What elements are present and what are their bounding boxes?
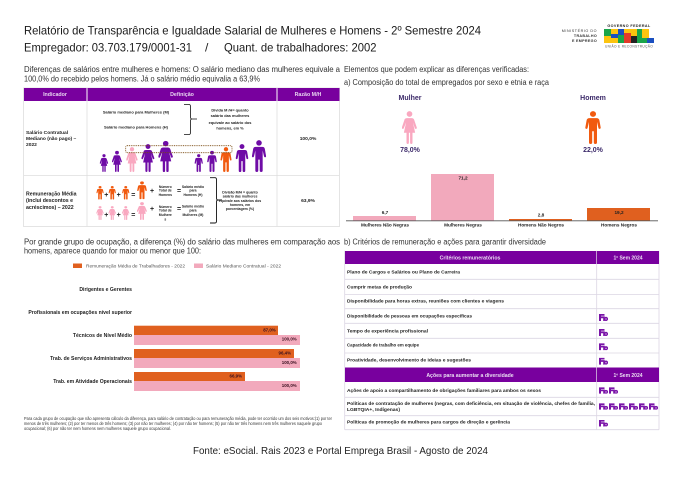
panel: critérios remuneratórios <box>345 251 659 430</box>
formula signs: + <box>117 192 121 199</box>
criteria list: Plano de Cargos e Salários ou Plano de Carreira <box>347 270 461 275</box>
bar chart: ocupações: Trab. de Serviços Administrativos <box>50 356 132 362</box>
title: Quant. de trabalhadores: 2002 <box>224 40 377 54</box>
row: salário contratual mediano: salário das mulheres <box>211 113 249 118</box>
panel: ações para aumentar a diversidade <box>345 368 659 426</box>
criteria list: Disponibilidade para horas extras, reuniões com clientes e viagens <box>347 299 505 304</box>
text block: grande grupo de ocupação: Por grande grupo de ocupação, a diferença (%) do salário das mulheres em comparação aos <box>24 237 340 246</box>
formula signs: = <box>131 212 135 219</box>
actions list <box>347 388 595 425</box>
icons: critérios marcados <box>599 314 608 365</box>
table header: Ações para aumentar a diversidade <box>426 373 514 379</box>
criteria list: Capacidade de trabalho em equipe <box>347 343 419 348</box>
formula text: Salário médio <box>182 185 204 189</box>
row: salário contratual mediano: Salário mediano para Mulheres (M) <box>103 110 170 114</box>
table header <box>345 368 659 382</box>
bar chart: sexo e raça: Homens Negros <box>601 222 637 228</box>
text block: grande grupo de ocupação: homens, aparece quando for maior ou menor que 100: <box>24 246 201 255</box>
formula signs: = <box>131 192 135 199</box>
bar chart: sexo e raça <box>346 174 658 228</box>
text block: diferenças de salários: Diferenças de salários entre mulheres e homens: O salário mediano das mulheres equivale a <box>24 65 341 74</box>
panel: mulher: Mulher <box>399 95 422 102</box>
bar chart: ocupações: 96,4% <box>279 350 291 356</box>
row: salário contratual mediano: equivale ao salário dos <box>209 120 251 125</box>
row: salário contratual mediano: 2022 <box>26 142 37 148</box>
row: salário contratual mediano: homens, em % <box>216 126 244 130</box>
bar chart: sexo e raça: 6,7 <box>382 210 389 215</box>
criteria list: Disponibilidade de pessoas em ocupações específicas <box>347 314 473 319</box>
footnote: menos de três mulheres; (2) por ter menos de três homens; (3) por não ter mulheres; (4) por não ter homens; (5) por não ter três homens nem três mulheres naquele grupo <box>24 421 323 426</box>
row: salário contratual mediano: Salário mediano para Homens (H) <box>104 124 169 130</box>
row: remuneração média: Remuneração Média <box>26 192 77 198</box>
formula text: Total de <box>159 189 172 193</box>
icons: ações marcadas <box>599 387 658 426</box>
bar chart: ocupações: Profissionais em ocupações nível superior <box>28 310 132 316</box>
formula text: Homens <box>159 193 172 197</box>
table header: Indicador <box>43 92 67 98</box>
bar chart: sexo e raça: 71,2 <box>458 176 468 181</box>
formula signs: + <box>117 212 121 219</box>
panel: mulher: 78,0% <box>400 147 421 154</box>
table header: Critérios remuneratórios <box>440 256 501 262</box>
bar chart: sexo e raça: Mulheres Negras <box>444 222 482 228</box>
formula signs: + <box>150 188 154 195</box>
panel: homem: 22,0% <box>583 147 604 154</box>
criteria list: Proatividade, desenvolvimento de ideias e sugestões <box>347 358 472 363</box>
text block: diferenças de salários <box>24 65 341 84</box>
formula text: Número <box>159 205 172 209</box>
formula definition: homens, em <box>230 203 250 207</box>
formula signs <box>104 188 181 219</box>
formula signs: = <box>177 188 181 195</box>
bar chart: sexo e raça: 19,2 <box>614 210 624 215</box>
panel: mulher <box>399 95 422 154</box>
table header: 1º Sem 2024 <box>613 373 643 379</box>
title: Relatório de Transparência e Igualdade Salarial de Mulheres e Homens - 2º Semestre 2024 <box>24 24 481 38</box>
bar chart: sexo e raça: 2,8 <box>538 212 545 218</box>
footnote <box>24 416 333 431</box>
row: salário contratual mediano: 100,0% <box>300 136 317 142</box>
icons: fórmula homens <box>96 181 147 200</box>
formula signs: + <box>150 206 154 213</box>
formula definition <box>219 190 261 211</box>
text block: elementos <box>344 65 550 87</box>
source: Fonte: eSocial. Rais 2023 e Portal Emprega Brasil - Agosto de 2024 <box>193 445 488 457</box>
legend: Remuneração Média de Trabalhadores - 2022 <box>86 264 185 270</box>
bar chart: ocupações: 100,0% <box>282 360 297 365</box>
formula signs: = <box>177 206 181 213</box>
row: salário contratual mediano: Divida M /H= quanto <box>211 108 249 112</box>
bar chart: ocupações: Técnicos de Nível Médio <box>73 333 132 339</box>
icons: mulheres e homens medianos <box>100 140 266 172</box>
title <box>24 24 481 54</box>
logo: ministério e governo federal: MINISTÉRIO DO <box>562 28 597 33</box>
formula signs: + <box>104 192 108 199</box>
formula definition: equivale aos salários dos <box>219 199 261 203</box>
formula definition: salário das mulheres <box>223 194 257 198</box>
row: remuneração média: (inclui descontos e <box>26 198 73 204</box>
table header: Razão M/H <box>295 92 322 98</box>
actions list: LGBTQIA+, Indígenas) <box>347 407 401 412</box>
logo: ministério e governo federal: TRABALHO <box>574 34 597 38</box>
formula text: Total de <box>159 209 172 213</box>
formula text <box>159 185 204 222</box>
bar chart: ocupações: Trab. em Atividade Operacionais <box>53 379 132 385</box>
icons: fórmula mulheres <box>96 202 147 220</box>
panel: homem: Homem <box>580 95 606 102</box>
text block: grande grupo de ocupação <box>24 237 340 255</box>
title: / <box>205 40 209 54</box>
actions list: Políticas de promoção de mulheres para cargos de direção e gerência <box>347 420 511 425</box>
text block: elementos: a) Composição do total de empregados por sexo e etnia e raça <box>344 78 550 87</box>
heading: critérios: b) Critérios de remuneração e ações para garantir diversidade <box>344 238 546 246</box>
row: remuneração média: acréscimos) – 2022 <box>26 205 74 211</box>
formula text: para <box>189 189 197 193</box>
formula text: Mulhere <box>159 213 172 217</box>
row: remuneração média <box>26 192 316 211</box>
bar chart: sexo e raça: Mulheres Não Negras <box>361 222 409 228</box>
title: Empregador: 03.703.179/0001-31 <box>24 40 192 54</box>
row: salário contratual mediano <box>26 108 317 148</box>
criteria list: Cumprir metas de produção <box>347 285 412 290</box>
formula text: Mulheres (M) <box>183 213 203 217</box>
formula definition: Divisão M/H = quanto <box>222 190 258 194</box>
criteria list <box>347 270 505 363</box>
formula signs: + <box>104 212 108 219</box>
bar chart: ocupações: 87,0% <box>263 328 276 332</box>
row: salário contratual mediano: Mediano (não pago) – <box>26 136 77 142</box>
formula text: para <box>189 209 197 213</box>
table header: 1º Sem 2024 <box>613 256 643 262</box>
bracket <box>210 178 222 223</box>
logo: ministério e governo federal: UNIÃO E RECONSTRUÇÃO <box>605 44 653 48</box>
formula text: s <box>164 218 166 222</box>
bar chart: ocupações: 100,0% <box>282 383 297 388</box>
panel: tabela de indicadores <box>24 88 340 226</box>
logo: ministério e governo federal: E EMPREGO <box>572 39 597 43</box>
bar chart: ocupações: 100,0% <box>282 336 297 342</box>
legend <box>73 264 281 270</box>
row: remuneração média: 63,9% <box>301 198 316 204</box>
criteria list: Tempo de experiência profissional <box>347 329 428 334</box>
actions list: Políticas de contratação de mulheres (negras, com deficiência, em situação de violência, chefes de família, <box>347 401 595 406</box>
bar chart: ocupações: 66,9% <box>230 374 242 378</box>
formula text: Número <box>159 185 172 189</box>
bar chart: ocupações <box>28 287 300 391</box>
bar chart: sexo e raça: Homens Não Negros <box>518 222 564 228</box>
row: salário contratual mediano: Salário Contratual <box>26 130 69 136</box>
actions list: Ações de apoio a compartilhamento de obrigações familiares para ambos os sexos <box>347 388 542 393</box>
footnote: ocupacional; (6) por não ter nem homens nem mulheres naquele grupo ocupacional. <box>24 426 171 431</box>
table header <box>24 88 340 101</box>
panel: homem <box>580 95 606 154</box>
text block: diferenças de salários: 100,0% do recebido pelos homens. Já o salário médio equivalia a 63,9% <box>24 74 260 84</box>
text block: elementos: Elementos que podem explicar as diferenças verificadas: <box>344 65 529 74</box>
legend: Salário Mediano Contratual - 2022 <box>206 264 281 270</box>
formula text: Homens (H) <box>183 193 203 197</box>
formula text: Salário médio <box>182 205 204 209</box>
logo: ministério e governo federal: GOVERNO FEDERAL <box>607 24 651 28</box>
footnote: Para cada grupo de ocupação que não apresenta cálculo da diferença, para salário de contratação ou para remuneração média, pode ter ocorrido um dos seis motivos:(1) por ter <box>24 416 333 421</box>
table header: Definição <box>170 92 195 98</box>
bar chart: ocupações: Dirigentes e Gerentes <box>79 287 132 293</box>
logo: ministério e governo federal <box>562 24 654 48</box>
formula definition: porcentagem (%) <box>226 207 254 211</box>
bracket <box>184 104 197 134</box>
table header <box>345 251 659 264</box>
